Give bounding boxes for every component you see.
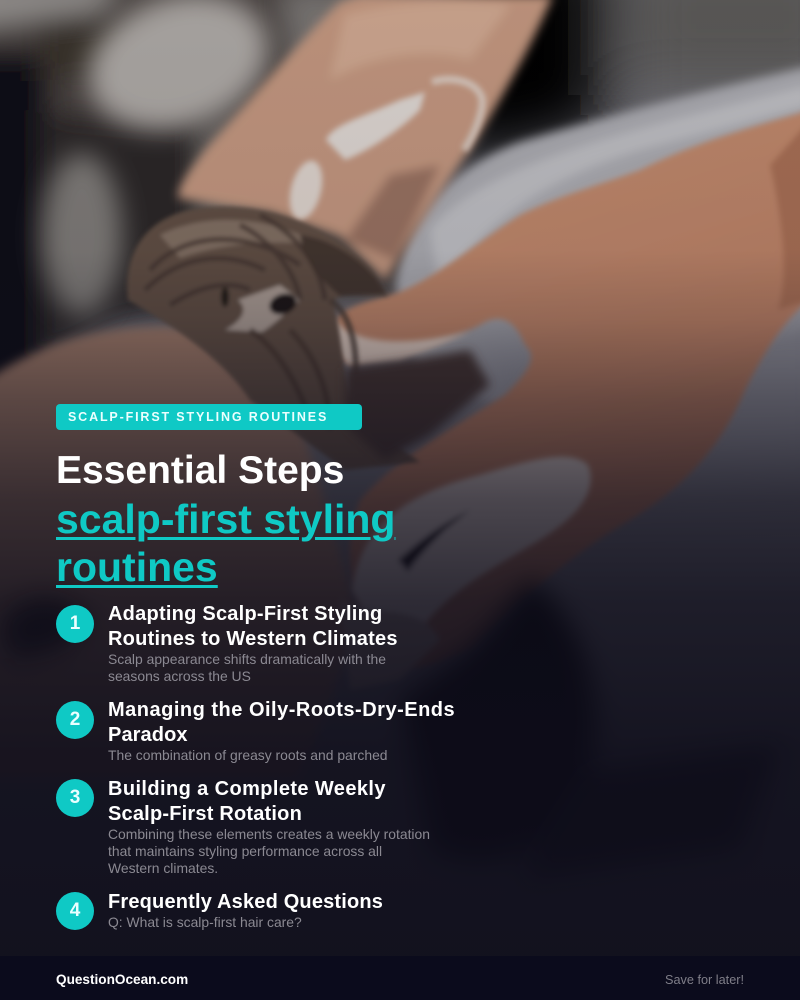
title: scalp-first styling — [56, 496, 395, 542]
right hand — [332, 110, 800, 668]
foam on fingers — [331, 318, 591, 690]
brand name: QuestionOcean.com — [56, 972, 188, 987]
step 3 text: Western climates. — [108, 860, 218, 876]
footer bar — [0, 956, 800, 1000]
step 2 text: Paradox — [108, 724, 188, 746]
step 1 text: Scalp appearance shifts dramatically with the — [108, 651, 386, 667]
step 2 text: Managing the Oily-Roots-Dry-Ends — [108, 698, 455, 720]
basin lower shade — [420, 300, 800, 480]
step 4 number badge — [56, 892, 94, 930]
blurred background blobs — [42, 0, 285, 317]
step 3 number badge — [56, 779, 94, 817]
category tag — [56, 404, 362, 430]
dark hair lower — [0, 580, 780, 880]
category tag: SCALP-FIRST STYLING ROUTINES — [68, 410, 328, 424]
step 4 number badge: 4 — [70, 900, 80, 921]
step 2 number badge: 2 — [70, 709, 80, 730]
step 1 number badge — [56, 605, 94, 643]
step 3 text — [108, 778, 430, 876]
save prompt: Save for later! — [665, 973, 744, 987]
step 2 text — [108, 698, 455, 763]
step 4 text: Frequently Asked Questions — [108, 890, 383, 912]
step 3 number badge: 3 — [70, 787, 80, 808]
hair curl — [127, 207, 420, 470]
step 2 text: The combination of greasy roots and parched — [108, 747, 388, 763]
step 1 text: Routines to Western Climates — [108, 628, 398, 650]
hair behind thumb — [345, 350, 490, 460]
forehead — [0, 327, 360, 780]
title: routines — [56, 544, 218, 590]
step 3 text: Scalp-First Rotation — [108, 802, 302, 824]
step 1 number badge: 1 — [70, 613, 80, 634]
step 4 text — [108, 890, 383, 930]
basin — [395, 66, 800, 420]
title — [56, 449, 396, 590]
dark backdrop behind basin — [440, 0, 800, 175]
step 3 text: Combining these elements creates a weekly rotation — [108, 826, 430, 842]
step 3 text: Building a Complete Weekly — [108, 778, 386, 800]
step 4 text: Q: What is scalp-first hair care? — [108, 914, 302, 930]
title: Essential Steps — [56, 449, 344, 492]
step 1 text: seasons across the US — [108, 668, 251, 684]
step 1 text: Adapting Scalp-First Styling — [108, 602, 383, 624]
step 2 number badge — [56, 701, 94, 739]
step 3 text: that maintains styling performance across all — [108, 843, 382, 859]
step 1 text — [108, 602, 398, 684]
upper hand — [178, 0, 553, 280]
dark studio backdrop top — [0, 0, 420, 450]
